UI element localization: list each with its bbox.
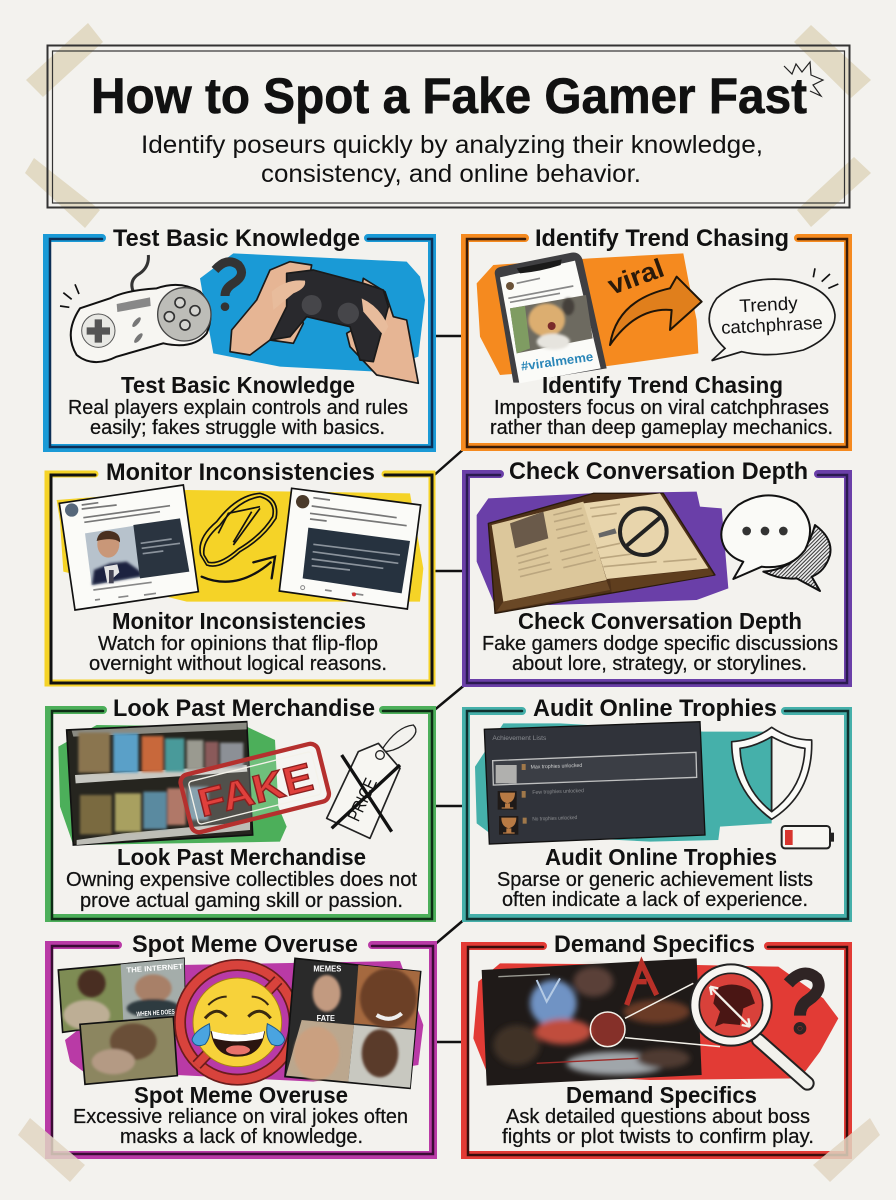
paint blob [58,725,287,845]
frame [49,945,433,1155]
masking tape: top corners [25,23,871,228]
meme collage left [58,958,185,1084]
photo: figure shelf [67,722,253,845]
panel: monitor inconsistencies [48,459,432,683]
heading: Identify Trend Chasing [535,225,789,252]
description: about lore, strategy, or storylines. [512,653,807,675]
description: Owning expensive collectibles does not [66,869,417,891]
description [502,1106,814,1148]
icon: question mark [215,262,242,309]
meme collage right [285,958,421,1088]
speech bubble: catchphrase [721,312,823,338]
illustration: lore book and chat [477,492,831,613]
illustration: boss fight zoom [473,958,838,1086]
frame [466,474,848,683]
screenshot: achievements: Few trophies unlocked [532,788,584,796]
description: prove actual gaming skill or passion. [80,890,403,912]
viral label: viral [604,253,668,301]
heading: Demand Specifics [554,931,755,958]
description [73,1106,408,1148]
screenshot: achievements: No trophies unlocked [532,815,577,823]
paint blob [200,253,425,372]
subtitle: Identify poseurs quickly by analyzing their knowledge, [141,131,763,159]
subtitle [141,131,763,188]
connectors between panels [432,336,467,1042]
description: fights or plot twists to confirm play. [502,1126,814,1148]
description [66,869,417,912]
paint blob [65,961,423,1082]
description: Watch for opinions that flip-flop [98,633,378,655]
subheading: Look Past Merchandise [117,844,366,870]
paint blob [57,490,423,602]
description: often indicate a lack of experience. [502,889,808,911]
icon: shield [732,727,812,819]
icon: hands holding gamepad [230,262,418,383]
speech bubble: Trendy [739,292,799,316]
icon: speech bubbles [721,495,831,591]
right tweet card [279,488,421,609]
left tweet card [59,485,198,610]
heading: Spot Meme Overuse [132,931,358,958]
icon: retro controller [60,255,211,362]
frame [466,711,848,919]
illustration: flip-flop tweets [57,485,423,610]
heading: Monitor Inconsistencies [106,459,375,486]
subheading: Check Conversation Depth [518,608,802,634]
meme collage right: FATE [317,1014,336,1023]
description: Excessive reliance on viral jokes often [73,1106,408,1128]
description [497,869,813,911]
arrow [610,277,702,345]
panel: look past merchandise [49,695,432,919]
illustration: memes [58,958,423,1088]
subheading: Monitor Inconsistencies [112,608,366,634]
icon: flip-flop [200,493,277,566]
icon: prohibition sign [620,508,667,555]
icon: question mark [788,974,819,1030]
frame [465,238,848,447]
illustration: collectibles [58,722,416,845]
panel: test basic knowledge [47,225,432,448]
subheading: Spot Meme Overuse [134,1082,348,1108]
description: overnight without logical reasons. [89,653,387,675]
panel: check conversation depth [466,458,848,683]
FAKE stamp: FAKE [194,755,317,826]
icon: title spark [784,62,823,96]
icon: phone with meme: #viralmeme [520,350,594,374]
heading: Audit Online Trophies [533,695,777,722]
heading: Test Basic Knowledge [113,225,360,252]
paint blob [477,492,728,605]
description: Imposters focus on viral catchphrases [494,397,829,419]
subheading: Test Basic Knowledge [121,372,355,398]
heading: Look Past Merchandise [113,695,375,722]
screenshot: achievements [484,722,705,844]
panel: audit online trophies [466,695,848,919]
meme collage left: WHEN HE DOES [136,1009,175,1018]
frame [49,710,432,919]
meme collage left: THE INTERNET [126,962,184,975]
icon: open book [488,493,715,613]
FAKE stamp [179,742,331,834]
subheading: Demand Specifics [566,1082,757,1108]
description [68,397,408,439]
description: masks a lack of knowledge. [120,1126,363,1148]
icon: phone with meme [495,253,607,383]
description: Real players explain controls and rules [68,397,408,419]
paint blob [477,253,698,375]
panel: demand specifics [465,931,848,1155]
subheading: Audit Online Trophies [545,844,777,870]
icon: low battery [782,826,834,848]
description [490,397,833,439]
screenshot: achievements: Max trophies unlocked [531,763,582,771]
paint blob [475,723,772,842]
screenshot: boss fight [482,958,702,1086]
frame [465,946,848,1155]
title box [48,46,850,208]
frame [47,238,432,448]
speech bubble [709,268,838,361]
description: Ask detailed questions about boss [506,1106,810,1128]
panel: identify trend chasing [465,225,848,447]
meme collage right: MEMES [313,964,342,974]
description: Fake gamers dodge specific discussions [482,633,838,655]
heading: Check Conversation Depth [509,458,808,485]
subheading: Identify Trend Chasing [542,372,783,398]
description: easily; fakes struggle with basics. [90,417,385,439]
icon: crossed-out laughing emoji [180,965,295,1080]
frame [48,474,432,683]
title: How to Spot a Fake Gamer Fast [91,68,807,124]
arrow [202,557,275,582]
description [89,633,387,675]
subtitle: consistency, and online behavior. [261,160,641,188]
icon: price tag crossed out [327,725,416,838]
icon: price tag crossed out: PRICE [343,775,381,824]
paint blob [473,963,838,1080]
screenshot: achievements: Achievement Lists [492,735,547,742]
masking tape: bottom corners [18,1118,880,1182]
icon: magnifying glass [690,964,807,1083]
illustration: viral phone [477,253,838,383]
description: rather than deep gameplay mechanics. [490,417,833,439]
description [482,633,838,675]
description: Sparse or generic achievement lists [497,869,813,891]
illustration: achievement list [475,722,834,848]
illustration: controllers [60,253,425,383]
zoom circle and lines [590,983,720,1047]
panel: spot meme overuse [49,931,433,1155]
